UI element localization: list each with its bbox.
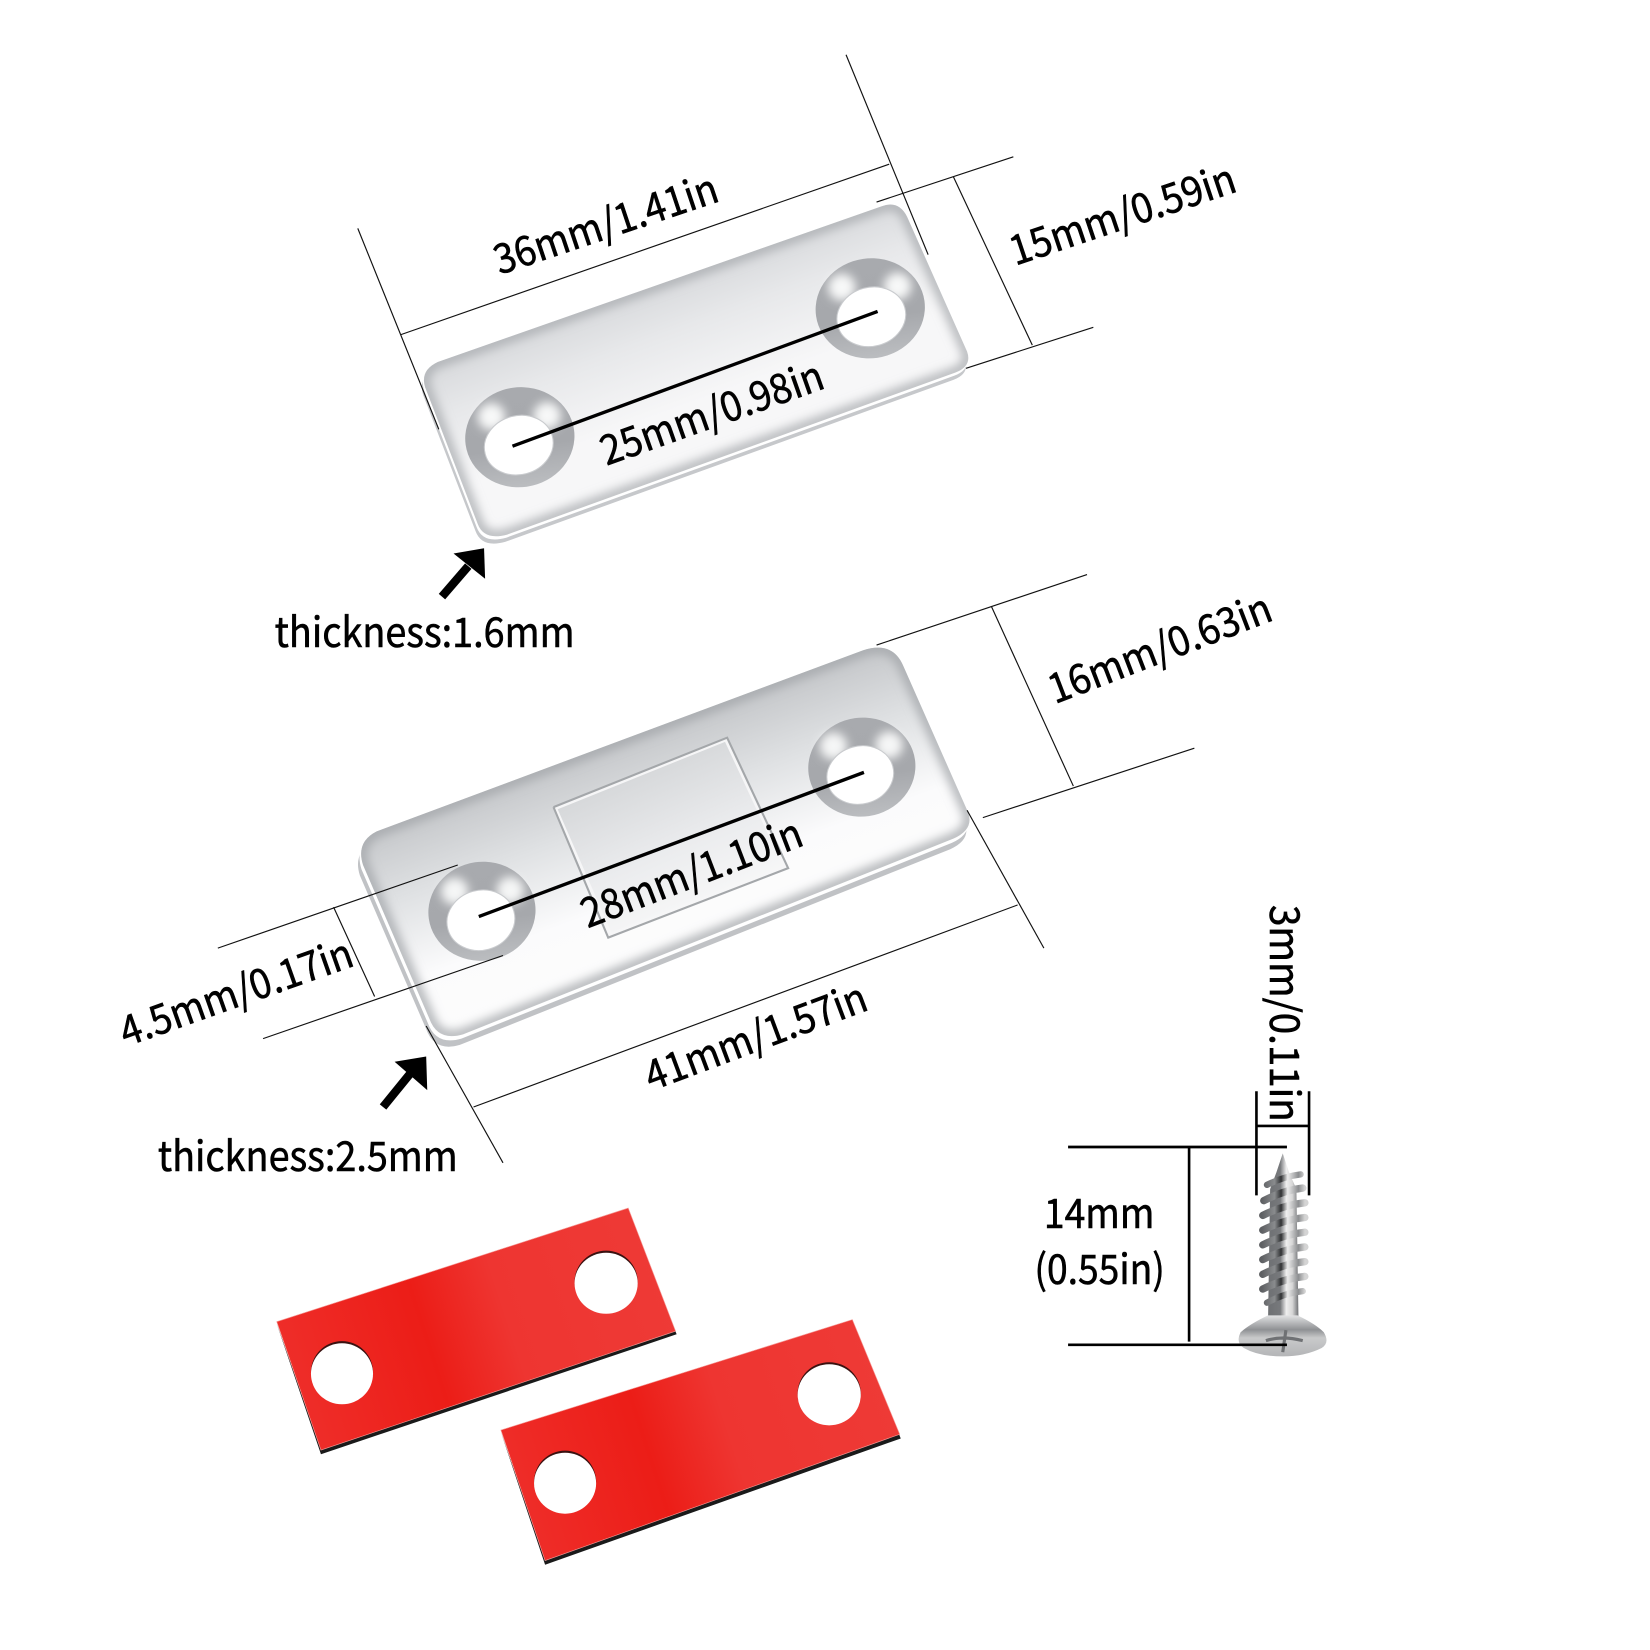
dimension: 4.5mm/0.17in: [110, 865, 503, 1058]
icon: screw: [1239, 1153, 1326, 1356]
plate rim: [422, 212, 966, 544]
dimension: 16mm/0.63in: 16mm/0.63in: [1038, 575, 1279, 715]
left countersunk hole: [422, 855, 542, 968]
plate face: [361, 648, 970, 1036]
dimension: 15mm/0.59in: 15mm/0.59in: [1000, 145, 1243, 277]
label: thickness 1.6mm: thickness:1.6mm: [275, 599, 575, 659]
dimension: 28mm/1.10in: 28mm/1.10in: [570, 800, 810, 940]
dimension: 41mm/1.57in: 41mm/1.57in: [635, 964, 874, 1102]
right countersunk hole: [809, 251, 931, 365]
panel: bottom magnet plate: [347, 631, 979, 1052]
dimension: 14mm screw length: (0.55in): [1034, 1236, 1165, 1296]
dimension: 25mm/0.98in: 25mm/0.98in: [590, 342, 831, 477]
dimension: 14mm screw length: 14mm: [1044, 1180, 1154, 1240]
left countersunk hole: [459, 380, 581, 494]
dimension: 36mm/1.41in: 36mm/1.41in: [484, 155, 725, 286]
right countersunk hole: [802, 711, 922, 824]
dimension: 25mm/0.98in: [512, 311, 878, 477]
dimension: 41mm/1.57in: [426, 810, 1044, 1163]
dimension: 4.5mm/0.17in: 4.5mm/0.17in: [110, 920, 360, 1058]
arrow: bottom plate thickness: [383, 1057, 427, 1107]
dimension: 28mm/1.10in: [479, 772, 864, 940]
pad edge: [501, 1432, 901, 1565]
pad face: [501, 1320, 900, 1561]
dimension: 16mm/0.63in: [877, 575, 1279, 818]
panel: adhesive pad 1: [277, 1208, 677, 1454]
screw head: [1239, 1315, 1326, 1356]
plate face: [424, 204, 968, 536]
dimension: 3mm/0.11in screw diameter: 3mm/0.11in: [1258, 905, 1318, 1122]
holes: [534, 1362, 861, 1514]
screw threads: [1263, 1174, 1305, 1303]
label: thickness 2.5mm: thickness:2.5mm: [158, 1123, 458, 1183]
dimension: 36mm/1.41in: [358, 55, 928, 429]
arrow: top plate thickness: [442, 548, 485, 597]
screw shank: [1268, 1153, 1299, 1322]
rim highlight: [360, 652, 968, 1040]
plate rim: [358, 658, 966, 1047]
rim highlight: [423, 208, 967, 539]
magnet square: [554, 738, 788, 938]
pad edge: [277, 1324, 677, 1454]
dimension: 14mm screw length: [1034, 1147, 1287, 1345]
panel: adhesive pad 2: [501, 1320, 901, 1565]
dimension: 15mm/0.59in: [877, 145, 1243, 368]
panel: top strike plate: [410, 189, 979, 547]
holes: [311, 1251, 638, 1404]
pad face: [277, 1208, 676, 1450]
